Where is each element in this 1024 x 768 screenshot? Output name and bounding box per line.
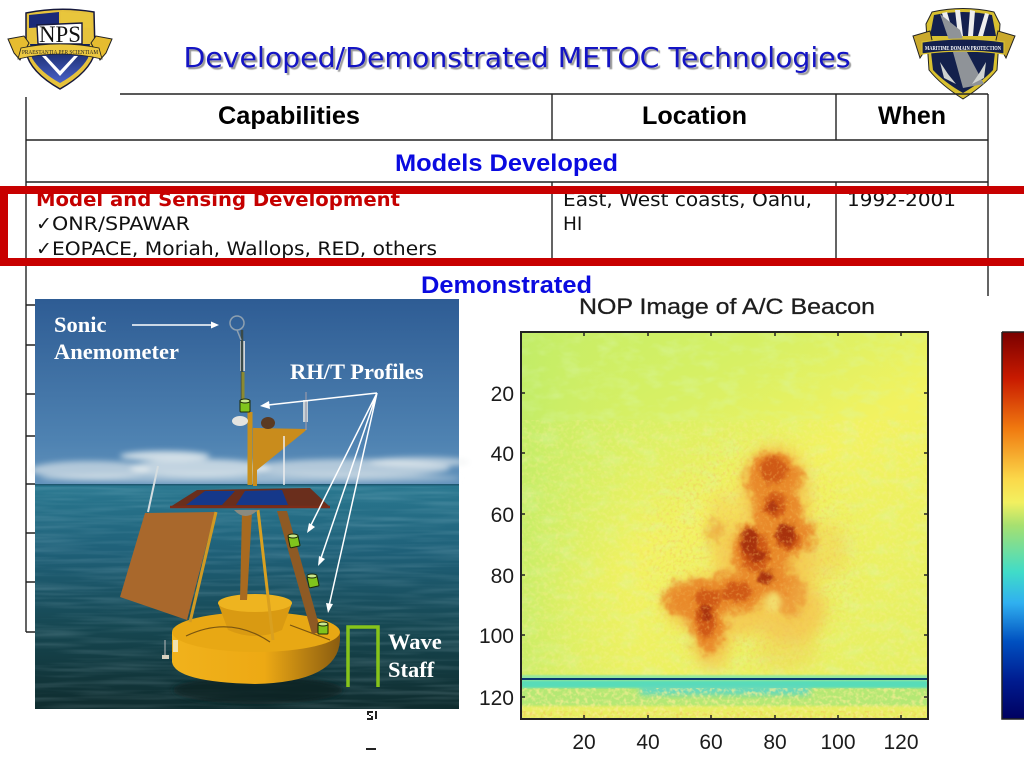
y axis labels: 120 [479,687,514,710]
row item: EOPACE and others: ✓ [36,238,52,260]
x axis labels: 120 [883,731,919,754]
y axis labels: 100 [479,625,514,648]
y axis labels: 40 [491,443,514,466]
RH/T sensor cans [240,399,328,634]
buoy hull [162,594,343,704]
arrows: RH/T profiles [260,393,377,613]
logo: NPS shield [8,9,112,89]
x axis labels: 100 [820,731,856,754]
sea [35,484,459,709]
column header: Capabilities: Capabilities [218,102,360,130]
buoy frame and mast [148,330,330,640]
heatmap plot [521,332,928,719]
title: Developed/Demonstrated METOC Technologies [184,41,850,74]
label: Sonic Anemometer: Anemometer [54,339,179,364]
column header: Location: Location [642,102,747,130]
logo text: NPS: NPS [39,22,81,47]
y axis labels [479,383,514,710]
x axis labels: 40 [636,731,660,754]
red highlight frame [4,190,1024,262]
location cell: East, West coasts, Oahu, [563,190,812,211]
x axis labels: 60 [699,731,723,754]
row item: ONR/SPAWAR: ONR/SPAWAR [52,214,190,235]
label: Wave Staff: Staff [388,657,435,682]
y axis labels: 80 [491,565,514,588]
section heading: Demonstrated: Demonstrated [421,272,592,299]
section heading: Models Developed: Models Developed [395,150,618,177]
when cell: 1992-2001 [847,190,956,211]
brown side panel [120,512,215,620]
plot frame [521,332,928,719]
label: RH/T Profiles: RH/T Profiles [290,359,424,384]
column header: When: When [878,102,946,130]
anemometer sensor [230,316,244,340]
x axis labels: 80 [763,731,787,754]
row item: ONR/SPAWAR: ✓ [36,213,52,235]
x axis labels [572,731,919,754]
clouds [30,451,470,483]
chart title: NOP Image of A/C Beacon [579,294,875,319]
panel: buoy photo [30,299,470,709]
x axis labels: 20 [572,731,596,754]
location cell: HI [563,214,582,235]
logo: Maritime Domain Protection shield [913,8,1015,99]
label: Wave Staff: Wave [388,629,442,654]
table [26,94,988,632]
colour scale bar [1002,332,1024,719]
label: Sonic Anemometer: Sonic [54,312,107,337]
heatmap fragments beneath photo [366,711,377,750]
logo motto: PRAESTANTIA PER SCIENTIAM [22,49,98,56]
panel: heatmap figure [459,294,1024,768]
row heading: Model and Sensing Development: Model and Sensing Development [36,189,400,211]
wave staff marker [348,627,378,687]
arrow: sonic anemometer [132,322,219,328]
y axis labels: 60 [491,504,514,527]
y axis labels: 20 [491,383,514,406]
row item: EOPACE and others: EOPACE, Moriah, Wallops, RED, others [52,239,437,260]
